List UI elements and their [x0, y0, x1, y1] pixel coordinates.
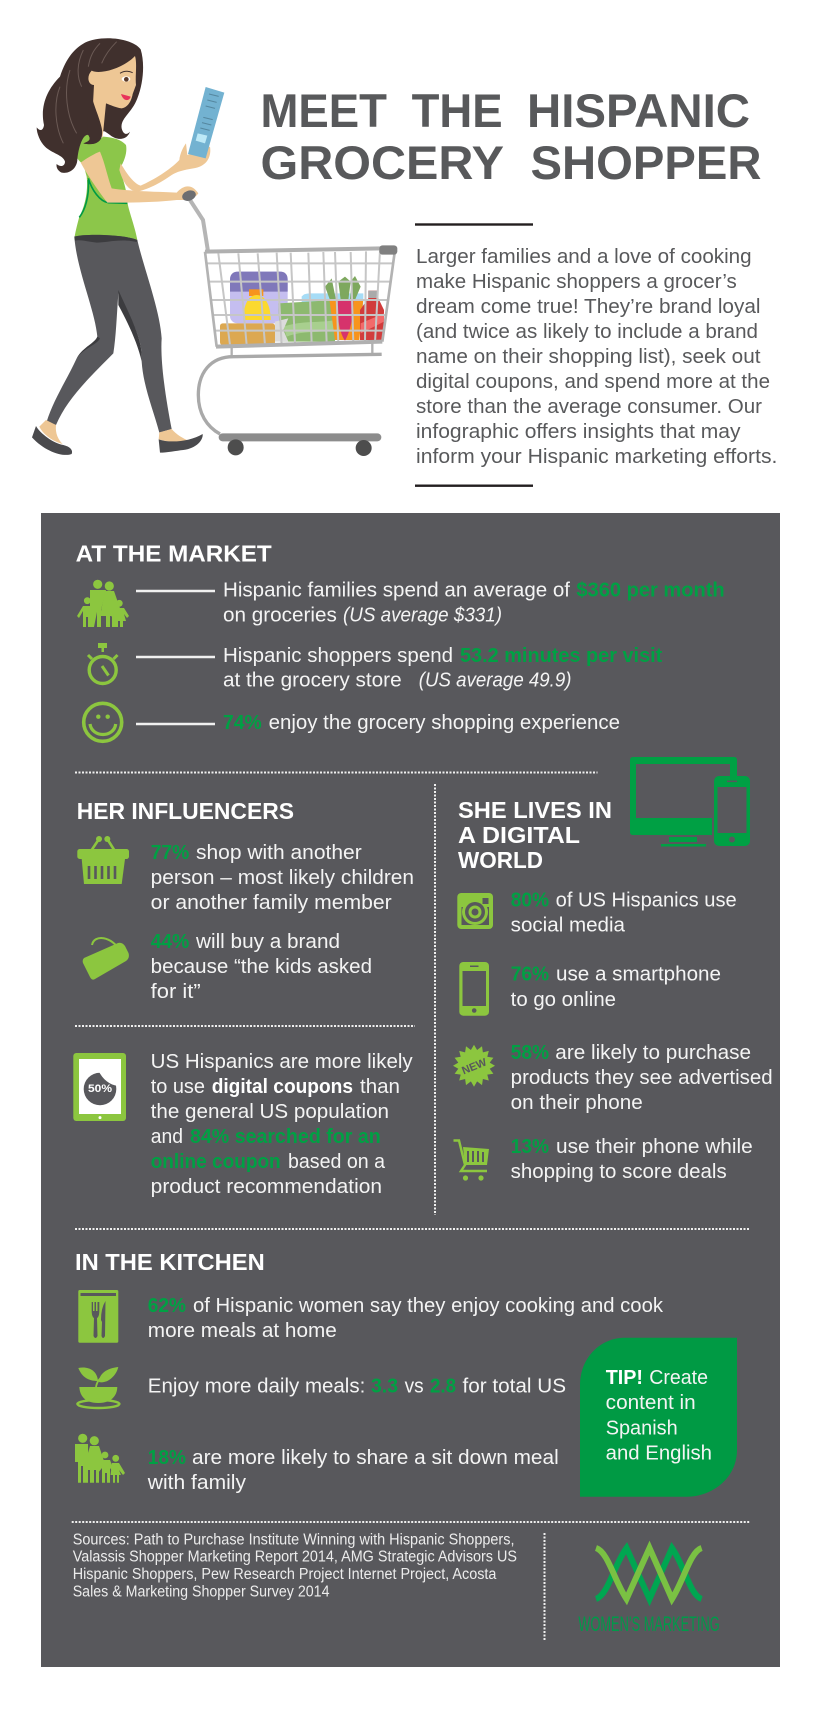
text: digital coupons: and — [151, 1126, 183, 1148]
text: advertised on phone: are likely to purchase — [555, 1042, 751, 1064]
sources text — [73, 1531, 517, 1601]
text: sit down meal — [147, 1447, 559, 1494]
title: HISPANIC — [527, 84, 750, 137]
logo: women's marketing: WOMEN’S MARKETING — [578, 1613, 720, 1636]
intro paragraph: infographic offers insights that may — [416, 421, 740, 443]
text: monthly spend: (US average $331) — [343, 605, 502, 627]
text: minutes per visit: Hispanic shoppers spend — [223, 645, 453, 667]
icon: new badge: NEW — [460, 1056, 489, 1077]
icon: tablet coupon: 50% — [88, 1083, 112, 1095]
text: score deals: 13% — [511, 1136, 549, 1158]
title: GROCERY — [260, 136, 504, 189]
text: monthly spend — [223, 580, 725, 627]
text: daily meals: 2.8 — [430, 1376, 456, 1398]
section: in the kitchen — [75, 1249, 737, 1497]
woman upper body — [37, 38, 224, 253]
callout: tip: and English — [606, 1442, 712, 1464]
icon: price tag — [83, 938, 129, 980]
text: enjoy cooking: 62% — [148, 1295, 186, 1317]
text: kids asked: because “the kids asked — [151, 956, 372, 978]
text: shop with another person — [151, 842, 414, 914]
text: smartphone: use a smartphone — [556, 964, 721, 986]
rule — [136, 590, 215, 592]
text: score deals: shopping to score deals — [511, 1161, 727, 1183]
icon: tablet coupon — [73, 1053, 126, 1121]
section: at the market — [76, 540, 725, 741]
sources text: Valassis Shopper Marketing Report 2014, AMG Strategic Advisors US — [73, 1549, 517, 1566]
cart frame — [198, 245, 397, 437]
intro paragraph: (and twice as likely to include a brand — [416, 321, 758, 343]
icon: bowl with plant — [77, 1367, 119, 1408]
icon: stopwatch — [88, 643, 118, 684]
text: digital coupons — [151, 1051, 413, 1198]
text: enjoy shopping: 74% — [223, 712, 262, 734]
callout: tip — [580, 1338, 737, 1497]
icon: basket — [77, 836, 129, 884]
text: minutes per visit: 53.2 minutes per visit — [460, 645, 663, 667]
text: enjoy shopping: enjoy the grocery shopping experience — [269, 712, 620, 734]
illustration: woman shopper — [32, 38, 224, 455]
intro paragraph: make Hispanic shoppers a grocer’s — [416, 271, 737, 293]
text: shop with another person: shop with another — [196, 842, 362, 864]
text: score deals: use their phone while — [556, 1136, 753, 1158]
text: advertised on phone: 58% — [511, 1042, 549, 1064]
sources text: Hispanic Shoppers, Pew Research Project Internet Project, Acosta — [73, 1566, 497, 1583]
groceries — [220, 272, 384, 345]
text: enjoy cooking — [148, 1295, 664, 1342]
text: advertised on phone — [511, 1042, 773, 1114]
title — [260, 84, 762, 189]
icon: shopping cart — [454, 1140, 489, 1181]
text: digital coupons: online coupon — [151, 1151, 281, 1173]
callout: tip: Spanish — [606, 1418, 678, 1440]
text: digital coupons: based on a — [288, 1151, 386, 1173]
panel: dark background — [41, 513, 780, 1667]
title: THE — [412, 84, 503, 137]
heading: at the market: AT THE MARKET — [76, 540, 272, 566]
text: daily meals: for total US — [462, 1376, 566, 1398]
text: minutes per visit: (US average 49.9) — [419, 670, 572, 692]
section: she lives in a digital world — [453, 757, 773, 1183]
text: digital coupons: US Hispanics are more likely — [151, 1051, 413, 1073]
text: minutes per visit — [223, 645, 663, 692]
cart wheels — [228, 439, 372, 456]
text: digital coupons: the general US population — [151, 1101, 389, 1123]
heading: digital world — [458, 797, 612, 873]
icon: new badge — [453, 1045, 495, 1087]
intro paragraph: Larger families and a love of cooking — [416, 246, 752, 268]
text: social media: social media — [511, 915, 626, 937]
text: shop with another person: person – most likely children — [151, 867, 414, 889]
icon: family at table — [75, 1434, 125, 1483]
icon: monitor and phone — [630, 757, 750, 846]
logo: women's marketing — [578, 1548, 720, 1636]
heading: her influencers: HER INFLUENCERS — [77, 798, 294, 824]
heading: digital world: SHE LIVES IN — [458, 797, 612, 823]
text: minutes per visit: at the grocery store — [223, 670, 402, 692]
text: kids asked — [151, 931, 372, 1003]
text: smartphone: 76% — [511, 964, 549, 986]
heading: digital world: A DIGITAL — [458, 822, 580, 848]
text: kids asked: for it” — [151, 981, 201, 1003]
callout: tip: TIP! — [606, 1367, 643, 1389]
cart wire basket — [207, 251, 393, 345]
text: monthly spend: on groceries — [223, 605, 337, 627]
text: daily meals: 3.3 — [371, 1376, 398, 1398]
intro paragraph: inform your Hispanic marketing efforts. — [416, 446, 777, 468]
section: her influencers — [73, 798, 415, 1198]
text: shop with another person: or another family member — [151, 892, 392, 914]
intro paragraph: store than the average consumer. Our — [416, 396, 762, 418]
text: social media — [511, 890, 737, 937]
sources text: Sales & Marketing Shopper Survey 2014 — [73, 1584, 330, 1601]
title: SHOPPER — [530, 136, 762, 189]
icon: recipe book — [78, 1290, 118, 1343]
callout: tip: Create — [649, 1367, 708, 1389]
text: smartphone: to go online — [511, 989, 616, 1011]
text: sit down meal: 18% — [148, 1447, 186, 1469]
text: daily meals — [148, 1376, 566, 1398]
text: sit down meal: are more likely to share a sit down meal — [192, 1447, 559, 1469]
title: MEET — [260, 84, 387, 137]
intro paragraph — [415, 223, 777, 487]
text: social media: 80% — [511, 890, 549, 912]
text: digital coupons: to use — [151, 1076, 205, 1098]
intro paragraph: digital coupons, and spend more at the — [416, 371, 770, 393]
heading: digital world: WORLD — [458, 847, 543, 873]
rule — [136, 723, 215, 725]
text: monthly spend: Hispanic families spend an average of — [223, 580, 570, 602]
text: sit down meal: with family — [147, 1472, 246, 1494]
rule — [136, 656, 215, 658]
text: digital coupons: 84% searched for an — [190, 1126, 381, 1148]
text: smartphone — [511, 964, 721, 1011]
text: daily meals: vs — [405, 1376, 424, 1398]
illustration: shopping cart with groceries — [198, 245, 397, 456]
icon: smartphone — [459, 962, 489, 1016]
woman legs — [32, 235, 203, 455]
text: daily meals: Enjoy more daily meals: — [148, 1376, 365, 1398]
sources text: Sources: Path to Purchase Institute Winning with Hispanic Shoppers, — [73, 1531, 514, 1548]
icon: smiley — [84, 703, 122, 741]
text: kids asked: 44% — [151, 931, 189, 953]
text: enjoy cooking: more meals at home — [148, 1320, 337, 1342]
text: kids asked: will buy a brand — [195, 931, 340, 953]
text: advertised on phone: products they see advertised — [511, 1067, 773, 1089]
text: digital coupons: digital coupons — [212, 1076, 353, 1098]
intro paragraph: dream come true! They’re brand loyal — [416, 296, 760, 318]
heading: in the kitchen: IN THE KITCHEN — [75, 1249, 265, 1275]
text: enjoy cooking: of Hispanic women say they enjoy cooking and cook — [193, 1295, 664, 1317]
text: monthly spend: $360 per month — [576, 580, 725, 602]
text: digital coupons: product recommendation — [151, 1176, 382, 1198]
callout: tip: content in — [606, 1392, 696, 1414]
text: shop with another person: 77% — [151, 842, 189, 864]
icon: camera — [457, 893, 493, 929]
intro paragraph: name on their shopping list), seek out — [416, 346, 761, 368]
text: digital coupons: than — [360, 1076, 400, 1098]
text: score deals — [511, 1136, 753, 1183]
text: advertised on phone: on their phone — [511, 1092, 643, 1114]
text: social media: of US Hispanics use — [556, 890, 737, 912]
icon: family — [77, 580, 129, 627]
